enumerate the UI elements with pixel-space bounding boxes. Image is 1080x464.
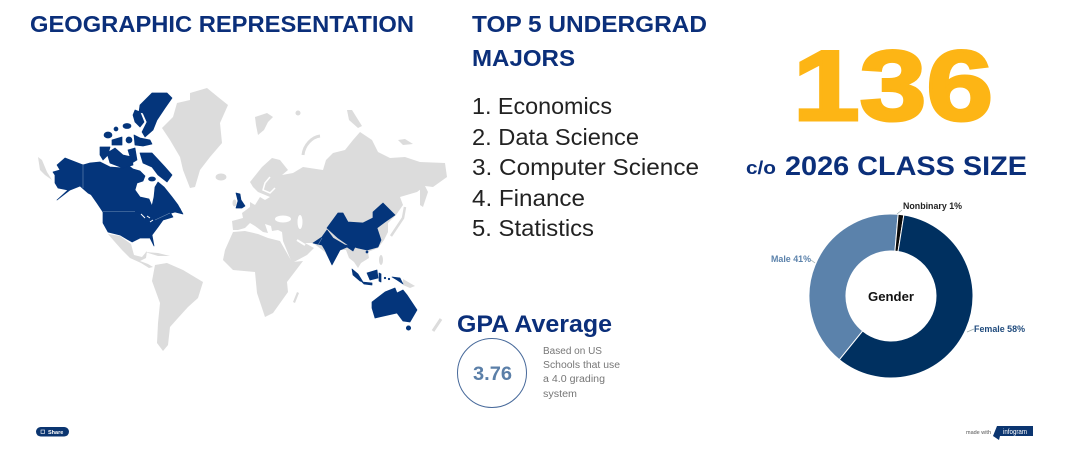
heading: class size: 2026 CLASS SIZE [785,151,1027,181]
map: highlighted countries [53,93,417,330]
GPA circle [458,338,526,408]
label: male: Male 41% [771,254,811,264]
heading: top 5 undergrad majors: MAJORS [472,45,575,71]
heading: GPA average: GPA Average [457,311,612,338]
infogram badge [966,426,1033,440]
label: female: Female 58% [974,324,1025,334]
world map [38,88,447,351]
map: Arctic islands [100,93,172,182]
list of majors [472,93,699,241]
map: unselected countries [38,88,447,351]
leader lines [811,210,974,332]
heading: class size: c/o [746,158,776,178]
map: UK [236,193,245,208]
map: Indonesia [352,269,403,285]
map: China [327,203,395,250]
GPA note [543,346,620,400]
label: nonbinary: Nonbinary 1% [903,201,962,211]
map: India and Pakistan [313,230,355,265]
infogram badge: made with [966,430,991,436]
map: USA [103,211,173,246]
list of majors: 4. Finance [472,185,585,211]
slice: nonbinary [895,214,904,252]
share button [36,427,69,436]
slice: male [809,214,898,360]
map: inland seas [263,177,305,245]
list of majors: 1. Economics [472,93,612,119]
map: borders and great lakes [83,165,322,245]
slice: female [839,215,973,378]
heading: geographic representation: GEOGRAPHIC REPRESENTATION [30,11,414,37]
share button: Share [48,430,63,436]
donut chart: gender [771,201,1025,378]
map: Australia [372,288,417,322]
map: Alaska [53,158,92,200]
heading: top 5 undergrad majors [472,11,707,71]
big number: class size: 136 [793,30,993,141]
GPA circle: 3.76 [473,364,512,385]
heading: top 5 undergrad majors: TOP 5 UNDERGRAD [472,11,707,37]
list of majors: 2. Data Science [472,124,639,150]
GPA note: a 4.0 grading [543,374,605,385]
infogram badge: infogram [1003,427,1027,436]
map: Canada [83,162,183,224]
label: center: Gender [868,289,914,304]
GPA note: system [543,389,577,400]
GPA note: Based on US [543,346,602,357]
list of majors: 3. Computer Science [472,154,699,180]
list of majors: 5. Statistics [472,215,594,241]
GPA note: Schools that use [543,360,620,371]
